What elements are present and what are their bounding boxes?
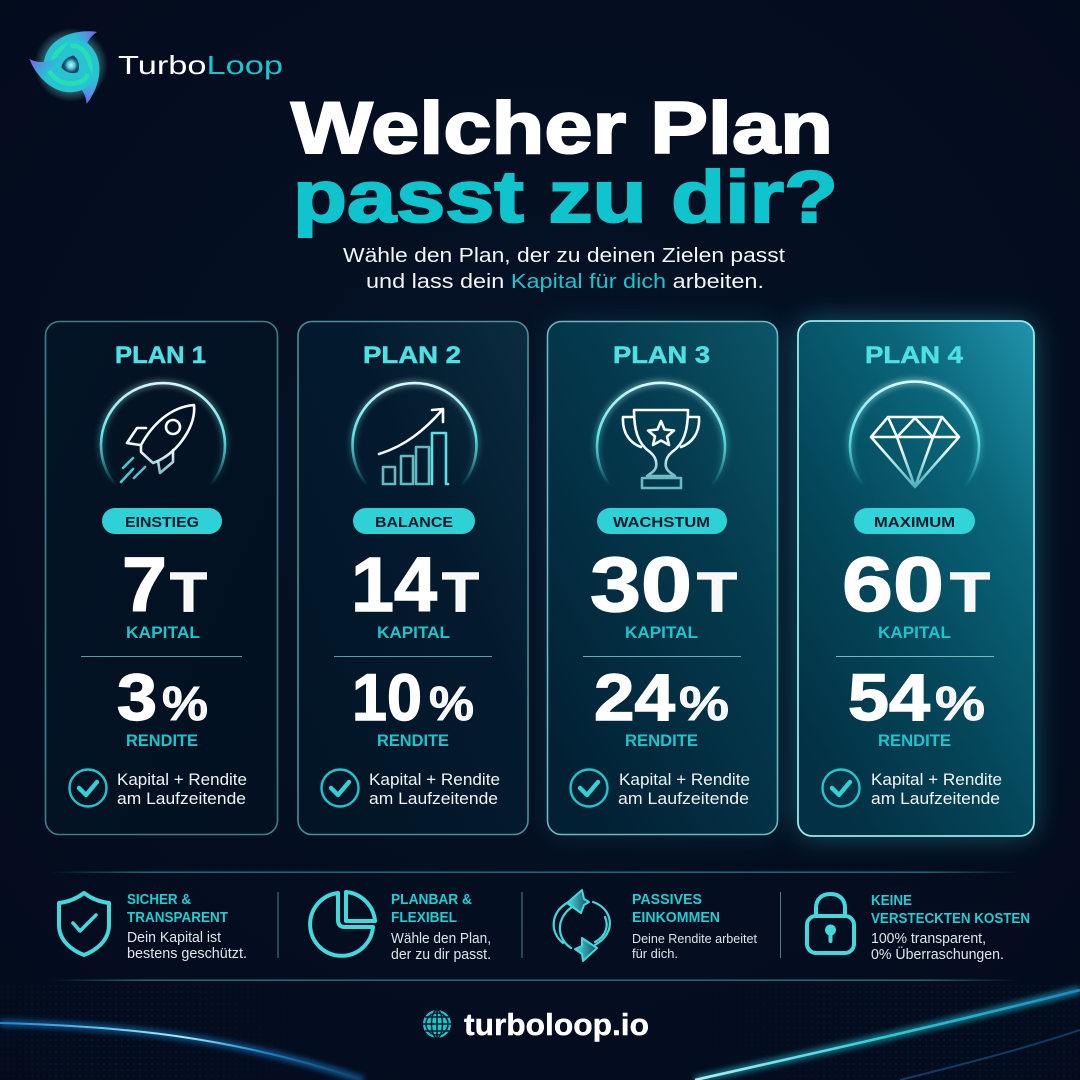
note with check icon: am Laufzeitende <box>369 790 498 808</box>
tag: Balance <box>353 508 475 534</box>
feature: no hidden costs <box>807 893 1030 963</box>
tag: Maximum: MAXIMUM <box>874 514 955 531</box>
capital: 60T: T <box>950 560 990 623</box>
logo wordmark: Turbo Loop <box>118 50 283 80</box>
dotted wave: bottom right <box>692 984 1080 1080</box>
return: 54%: RENDITE <box>878 732 951 750</box>
feature text: PASSIVES <box>632 892 702 908</box>
icon: globe <box>423 1010 451 1038</box>
feature: plannable <box>310 892 491 963</box>
plan 3 heading: PLAN 3 <box>613 342 710 369</box>
note with check icon <box>322 770 500 808</box>
feature text: KEINE <box>871 893 912 909</box>
plan 4 heading: PLAN 4 <box>865 342 964 369</box>
tag: Maximum <box>854 508 975 534</box>
feature text: 0% Überraschungen. <box>871 945 1004 963</box>
feature text: für dich. <box>632 946 678 961</box>
capital: 14T: 14 <box>351 542 437 628</box>
note with check icon: am Laufzeitende <box>618 790 749 808</box>
return: 24%: % <box>679 678 729 731</box>
feature text: PLANBAR & <box>391 892 472 908</box>
note with check icon: Kapital + Rendite <box>619 771 750 789</box>
capital: 60T: 60 <box>842 542 944 628</box>
return: 24% <box>594 660 729 750</box>
icon: loop arrows <box>554 890 610 961</box>
subtitle <box>343 245 786 293</box>
feature: passive income <box>554 890 757 961</box>
feature text: 100% transparent, <box>871 931 986 947</box>
note with check icon: am Laufzeitende <box>871 790 1000 808</box>
capital: 7T: KAPITAL <box>126 624 200 642</box>
subtitle: und lass dein Kapital für dich arbeiten. <box>366 271 764 293</box>
return: 54% <box>848 660 985 750</box>
icon: growth chart <box>352 383 477 488</box>
icon: padlock <box>807 894 854 953</box>
panel: plan 4 <box>798 321 1034 836</box>
capital: 7T <box>122 542 207 642</box>
feature text: Deine Rendite arbeitet <box>632 931 757 946</box>
note with check icon: am Laufzeitende <box>117 790 246 808</box>
feature: secure <box>59 892 247 962</box>
panel: plan 3 <box>548 322 778 834</box>
return: 24%: 24 <box>594 660 675 734</box>
return: 3% <box>117 660 208 750</box>
capital: 30T: KAPITAL <box>625 624 698 642</box>
capital: 14T <box>351 542 479 642</box>
feature text: VERSTECKTEN KOSTEN <box>871 911 1030 927</box>
subtitle: Wähle den Plan, der zu deinen Zielen passt <box>343 245 786 267</box>
tag: Wachstum <box>597 508 727 534</box>
tag: Einstieg: EINSTIEG <box>125 514 199 531</box>
icon: swirl <box>29 28 114 105</box>
plan 1 heading: PLAN 1 <box>115 342 206 369</box>
icon: rocket <box>101 383 225 488</box>
return: 10% <box>352 660 474 750</box>
website footer <box>423 1007 649 1042</box>
feature text: SICHER & <box>127 892 191 908</box>
capital: 30T: 30 <box>590 542 692 628</box>
capital: 14T: T <box>442 560 479 623</box>
title: passt zu dir? <box>293 157 838 238</box>
note with check icon: Kapital + Rendite <box>871 771 1002 789</box>
panel: plan 1 <box>46 322 278 834</box>
capital: 7T: T <box>170 560 207 623</box>
feature text: FLEXIBEL <box>391 910 457 926</box>
website url: turboloop.io <box>464 1007 649 1042</box>
note with check icon: Kapital + Rendite <box>369 771 500 789</box>
icon: trophy <box>597 383 725 488</box>
tag: Wachstum: WACHSTUM <box>613 514 710 531</box>
capital: 7T: 7 <box>122 542 167 628</box>
feature text: Dein Kapital ist <box>127 930 221 946</box>
tag: Balance: BALANCE <box>375 514 453 531</box>
feature text: TRANSPARENT <box>127 910 228 926</box>
return: 10%: % <box>429 678 474 731</box>
capital: 60T <box>842 542 990 642</box>
return: 54%: % <box>935 678 985 731</box>
dotted wave: bottom left <box>0 985 400 1080</box>
feature text: der zu dir passt. <box>391 947 491 963</box>
tag: Einstieg <box>102 508 222 534</box>
feature text <box>632 892 757 961</box>
logo <box>29 28 283 105</box>
feature text: bestens geschützt. <box>127 946 247 962</box>
title <box>291 88 838 238</box>
capital: 14T: KAPITAL <box>377 624 450 642</box>
capital: 60T: KAPITAL <box>878 624 951 642</box>
icon: pie chart <box>310 892 375 956</box>
return: 24%: RENDITE <box>625 732 698 750</box>
feature text <box>871 893 1030 963</box>
feature text: Wähle den Plan, <box>391 931 491 947</box>
return: 10%: 10 <box>352 660 422 734</box>
capital: 30T: T <box>697 560 737 623</box>
feature text: EINKOMMEN <box>632 910 720 926</box>
icon: shield <box>59 893 109 955</box>
panel: plan 2 <box>298 322 528 834</box>
plan 2 heading: PLAN 2 <box>363 342 461 369</box>
note with check icon: Kapital + Rendite <box>117 771 247 789</box>
feature text <box>127 892 247 962</box>
note with check icon <box>822 770 1002 808</box>
capital: 30T <box>590 542 737 642</box>
return: 3%: % <box>162 678 208 731</box>
return: 10%: RENDITE <box>377 732 449 750</box>
title: Welcher Plan <box>291 88 833 169</box>
return: 3%: RENDITE <box>126 732 198 750</box>
feature text <box>391 892 491 963</box>
note with check icon <box>70 770 247 808</box>
icon: diamond <box>850 382 979 488</box>
return: 54%: 54 <box>848 660 930 734</box>
note with check icon <box>570 770 750 808</box>
return: 3%: 3 <box>117 660 157 734</box>
